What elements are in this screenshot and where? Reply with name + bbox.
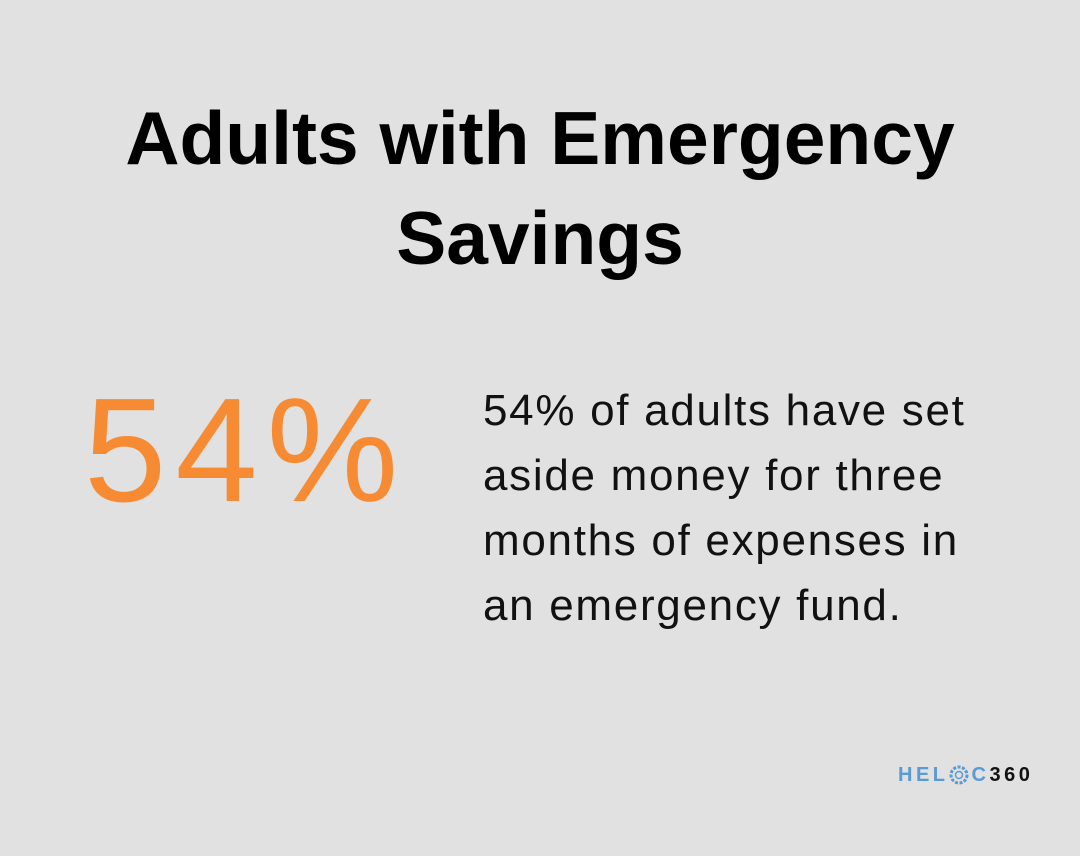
description text: months of expenses in [483, 516, 959, 565]
logo [898, 764, 1033, 786]
big statistic: 54% [84, 368, 407, 533]
logo: HEL [898, 764, 948, 786]
title: Savings [396, 196, 684, 280]
logo: 360 [989, 764, 1033, 786]
description text: 54% of adults have set [483, 386, 966, 435]
title [125, 96, 955, 280]
logo: C [972, 764, 989, 786]
description text [483, 386, 966, 630]
description text: aside money for three [483, 451, 944, 500]
title: Adults with Emergency [125, 96, 955, 180]
description text: an emergency fund. [483, 581, 903, 630]
